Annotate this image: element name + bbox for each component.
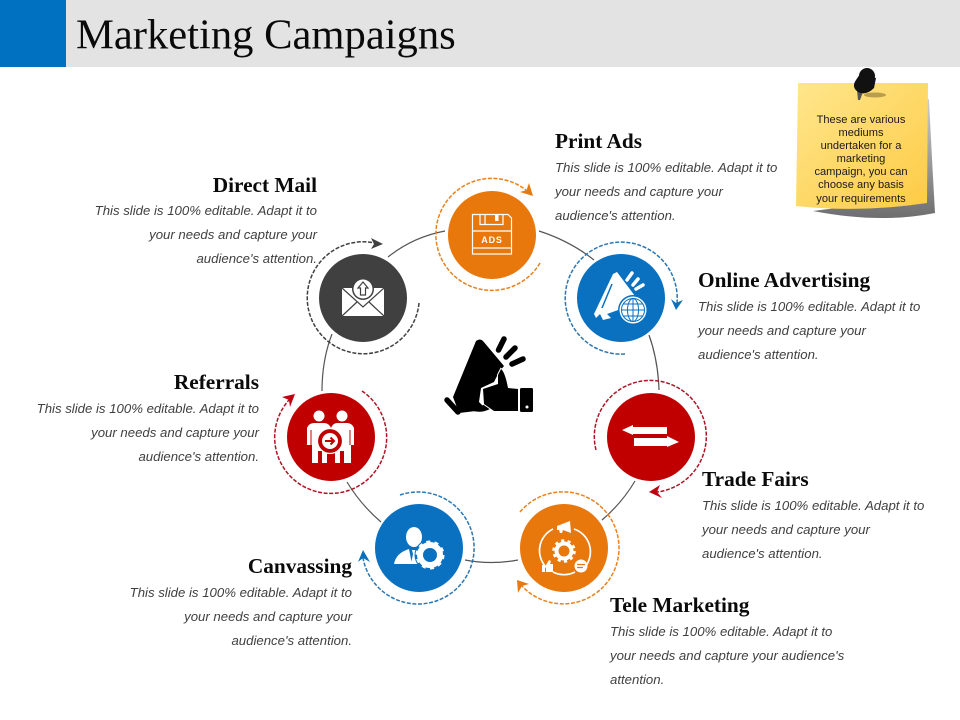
node: Print Ads [436,178,540,290]
label: Canvassing: audience's attention. [231,633,352,648]
note text: undertaken for a [821,140,902,152]
icon: push pin [854,68,886,100]
title: Marketing Campaigns [76,12,456,58]
label: Direct Mail: Direct Mail [213,173,317,197]
label: Direct Mail: This slide is 100% editable. Adapt it to [95,203,317,218]
label: Print Ads: This slide is 100% editable. Adapt it to [555,160,777,175]
node: Referrals [275,391,387,493]
label: Online Advertising: Online Advertising [698,268,871,292]
node: Direct Mail [307,238,419,354]
icon: envelope with upload [342,278,384,316]
icon: floppy ads: ADS [481,235,503,245]
header band [0,0,960,67]
note text: campaign, you can [814,166,908,178]
label: Online Advertising: This slide is 100% editable. Adapt it to [698,299,920,314]
note text: mediums [838,127,884,139]
icon: opposing arrows [622,425,679,447]
icon: megaphone and globe [594,272,648,325]
label: Referrals: your needs and capture your [90,425,260,440]
node: Canvassing [358,492,474,604]
label: Tele Marketing [609,593,845,687]
label: Referrals [37,370,260,464]
label: Trade Fairs: your needs and capture your [701,522,870,537]
label: Trade Fairs: Trade Fairs [702,467,809,491]
label: Referrals: Referrals [174,370,259,394]
label: Canvassing [130,554,353,648]
label: Print Ads: Print Ads [555,129,642,153]
label: Online Advertising: your needs and capture your [697,323,866,338]
label: Online Advertising: audience's attention. [698,347,819,362]
label: Tele Marketing: attention. [610,672,664,687]
label: Referrals: This slide is 100% editable. Adapt it to [37,401,259,416]
icon: person with gear [394,527,446,570]
note text: These are various [817,114,906,126]
label: Trade Fairs: This slide is 100% editable. Adapt it to [702,498,924,513]
label: Direct Mail [95,173,318,266]
note text: marketing [837,153,885,165]
label: Tele Marketing: This slide is 100% editable. Adapt it to [610,624,832,639]
note text: choose any basis [818,179,904,191]
connector ring [322,231,659,562]
sticky note [796,68,935,218]
label: Print Ads: your needs and capture your [554,184,723,199]
label: Direct Mail: audience's attention. [196,251,317,266]
center icon: megaphone and thumbs up [447,339,533,413]
label: Tele Marketing: Tele Marketing [610,593,750,617]
label: Online Advertising [697,268,920,362]
label: Canvassing: your needs and capture your [183,609,353,624]
label: Canvassing: Canvassing [248,554,352,578]
label: Trade Fairs [701,467,924,561]
icon: two people referral [307,410,354,463]
node: Tele Marketing [517,492,619,604]
label: Tele Marketing: your needs and capture your audience's [609,648,845,663]
label: Referrals: audience's attention. [138,449,259,464]
label: Trade Fairs: audience's attention. [702,546,823,561]
label: Print Ads [554,129,777,223]
node: Trade Fairs [594,380,706,498]
icon: campaign cycle [540,521,590,575]
note text: your requirements [816,193,906,205]
node: Online Advertising [565,242,683,354]
label: Print Ads: audience's attention. [555,208,676,223]
label: Direct Mail: your needs and capture your [148,227,318,242]
label: Canvassing: This slide is 100% editable. Adapt it to [130,585,352,600]
